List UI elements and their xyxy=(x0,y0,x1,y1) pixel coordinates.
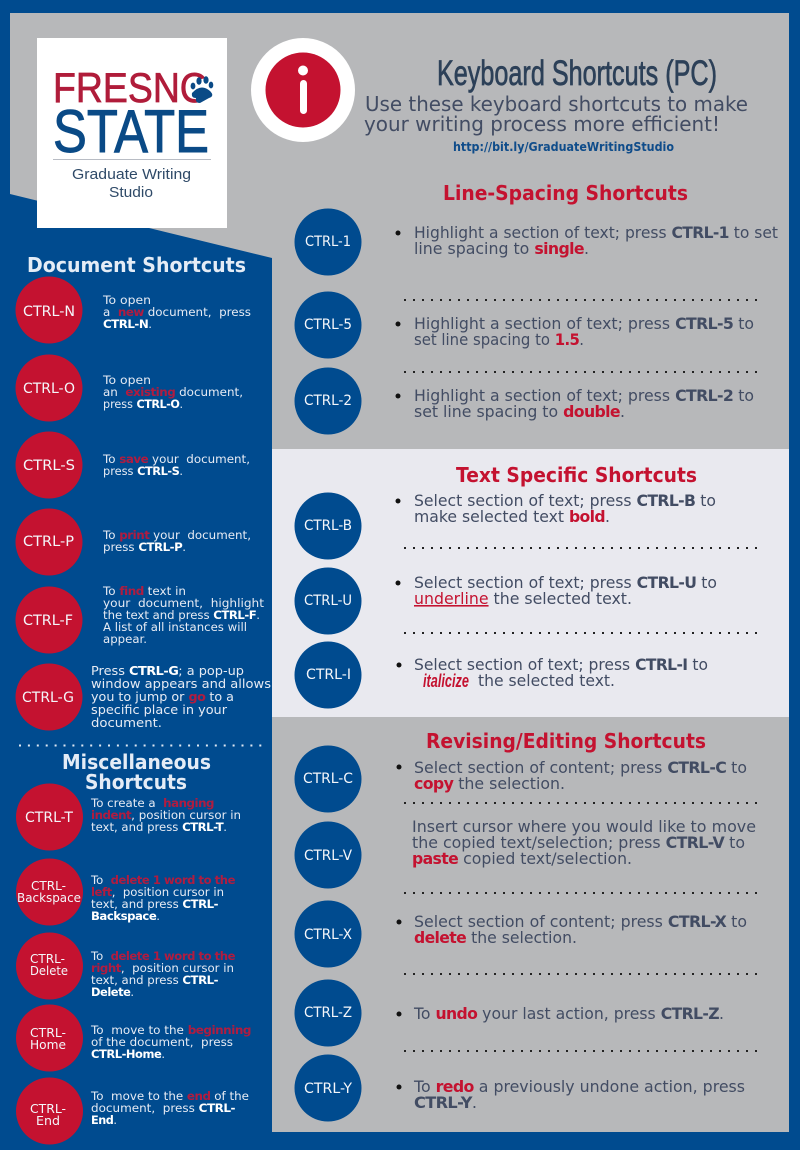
row: CTRL-Z: To undo your last action, press CTRL-Z. xyxy=(413,1004,724,1023)
row: CTRL-End: To move to the end of the xyxy=(90,1089,249,1103)
row: CTRL-Y xyxy=(294,1054,745,1122)
icon: information xyxy=(251,38,355,142)
logo: Fresno State Graduate Writing Studio: Studio xyxy=(109,184,153,201)
heading: revising/editing: Revising/Editing Shortcuts xyxy=(426,729,706,753)
row: CTRL-End: CTRL- xyxy=(30,1102,66,1117)
row: CTRL-G: CTRL-G xyxy=(22,690,74,706)
row: CTRL-O: an existing document, xyxy=(103,385,243,399)
row: CTRL-I: CTRL-I xyxy=(306,667,351,683)
row: CTRL-Z: CTRL-Z xyxy=(304,1005,352,1021)
row: CTRL-T: To create a hanging xyxy=(90,796,214,810)
row: CTRL-P xyxy=(16,508,251,576)
row: CTRL-N: CTRL-N xyxy=(23,304,75,320)
row: CTRL-N: CTRL-N. xyxy=(103,317,152,331)
row: CTRL-Backspace: Backspace xyxy=(17,891,81,906)
subtitle: your writing process more efficient! xyxy=(364,112,720,136)
row: CTRL-Home: CTRL- xyxy=(30,1026,66,1041)
row: CTRL-G: Press CTRL-G; a pop-up xyxy=(91,664,244,679)
row: CTRL-Delete xyxy=(16,932,235,1000)
row: CTRL-Backspace xyxy=(16,858,235,926)
row: CTRL-U: CTRL-U xyxy=(304,593,352,609)
heading: text specific: Text Specific Shortcuts xyxy=(456,463,697,487)
row: CTRL-G: you to jump or go to a xyxy=(91,690,234,705)
row: CTRL-End: document, press CTRL- xyxy=(91,1101,236,1115)
row: CTRL-X xyxy=(294,900,747,968)
row: CTRL-F: the text and press CTRL-F. xyxy=(103,608,260,622)
logo: Fresno State Graduate Writing Studio xyxy=(37,38,227,228)
row: CTRL-G: window appears and allows xyxy=(91,677,271,692)
row: CTRL-T: CTRL-T xyxy=(25,810,73,826)
row: CTRL-V: paste copied text/selection. xyxy=(412,849,632,868)
row: CTRL-I xyxy=(294,642,708,708)
row: CTRL-P: To print your document, xyxy=(102,528,251,542)
row: CTRL-Y: To redo a previously undone action, press xyxy=(413,1077,745,1096)
heading: miscellaneous shortcuts: Miscellaneous xyxy=(62,750,211,774)
row: CTRL-2: set line spacing to double. xyxy=(414,402,625,421)
row: CTRL-F: your document, highlight xyxy=(103,596,264,610)
row: CTRL-G xyxy=(16,664,271,731)
panel: miscellaneous shortcuts xyxy=(16,750,251,1144)
row: CTRL-Delete: To delete 1 word to the xyxy=(90,949,235,963)
row: CTRL-Delete: Delete. xyxy=(91,985,134,999)
row: CTRL-5 xyxy=(294,292,754,358)
panel: revising/editing shortcuts xyxy=(294,729,758,1122)
row: CTRL-Backspace: text, and press CTRL- xyxy=(91,897,219,911)
row: CTRL-Delete: text, and press CTRL- xyxy=(91,973,219,987)
row: CTRL-X: CTRL-X xyxy=(304,927,352,943)
row: CTRL-F: A list of all instances will xyxy=(103,620,247,634)
row: CTRL-B: make selected text bold. xyxy=(414,507,610,526)
row: CTRL-1: line spacing to single. xyxy=(414,239,589,258)
row: CTRL-Backspace: CTRL- xyxy=(31,879,66,894)
row: CTRL-Home xyxy=(16,1004,251,1072)
row: CTRL-T: text, and press CTRL-T. xyxy=(91,820,227,834)
panel: text specific shortcuts xyxy=(294,463,758,708)
row: CTRL-V: CTRL-V xyxy=(304,848,352,864)
row: CTRL-C: CTRL-C xyxy=(303,771,353,787)
row: CTRL-B xyxy=(294,491,716,560)
subtitle xyxy=(364,92,748,136)
row: CTRL-T: indent, position cursor in xyxy=(91,808,241,822)
row: CTRL-V: the copied text/selection; press CTRL-V to xyxy=(412,833,745,852)
row: CTRL-Home: Home xyxy=(30,1038,66,1053)
row: CTRL-2 xyxy=(294,368,754,434)
row: CTRL-N xyxy=(16,276,251,344)
row: CTRL-Backspace: To delete 1 word to the xyxy=(90,873,235,887)
row: CTRL-5: Highlight a section of text; press CTRL-5 to xyxy=(414,314,754,333)
logo: Fresno State Graduate Writing Studio: FRESNO xyxy=(53,64,209,111)
row: CTRL-Z xyxy=(294,980,724,1046)
heading: miscellaneous shortcuts: Shortcuts xyxy=(85,770,187,794)
row: CTRL-O xyxy=(16,354,243,422)
row: CTRL-S: press CTRL-S. xyxy=(103,464,183,478)
row: CTRL-Home: CTRL-Home. xyxy=(91,1047,165,1061)
row: CTRL-5: set line spacing to 1.5. xyxy=(414,330,584,349)
row: CTRL-G: document. xyxy=(91,716,162,731)
row: CTRL-P: CTRL-P xyxy=(23,534,74,550)
row: CTRL-Backspace: left, position cursor in xyxy=(91,885,224,899)
row: CTRL-Delete: Delete xyxy=(30,964,68,979)
row: CTRL-U: underline the selected text. xyxy=(414,589,632,608)
row: CTRL-2: Highlight a section of text; press CTRL-2 to xyxy=(414,386,754,405)
row: CTRL-B: Select section of text; press CTRL-B to xyxy=(414,491,716,510)
row: CTRL-End: End xyxy=(36,1114,60,1129)
row: CTRL-Delete: CTRL- xyxy=(30,952,65,967)
row: CTRL-I: Select section of text; press CTRL-I to xyxy=(414,655,708,674)
row: CTRL-2: CTRL-2 xyxy=(304,393,352,409)
row: CTRL-F: CTRL-F xyxy=(23,613,73,629)
row: CTRL-S: CTRL-S xyxy=(23,458,75,474)
row: CTRL-S: To save your document, xyxy=(102,452,250,466)
row: CTRL-1 xyxy=(294,208,778,276)
row: CTRL-P: press CTRL-P. xyxy=(103,540,186,554)
row: CTRL-Home: of the document, press xyxy=(91,1035,233,1049)
row: CTRL-C: Select section of content; press CTRL-C to xyxy=(414,758,747,777)
heading: miscellaneous shortcuts xyxy=(62,750,211,794)
row: CTRL-B: CTRL-B xyxy=(304,518,352,534)
row: CTRL-O: To open xyxy=(102,373,151,387)
row: CTRL-C xyxy=(294,746,747,812)
logo: Fresno State Graduate Writing Studio: Graduate Writing xyxy=(72,166,191,183)
row: CTRL-V xyxy=(294,817,756,888)
row: CTRL-Y: CTRL-Y xyxy=(304,1081,352,1097)
row: CTRL-End: End. xyxy=(91,1113,117,1127)
logo: Fresno State Graduate Writing Studio: STATE xyxy=(53,98,209,165)
row: CTRL-G: specific place in your xyxy=(91,703,228,718)
row: CTRL-5: CTRL-5 xyxy=(304,317,352,333)
row: CTRL-U: Select section of text; press CTRL-U to xyxy=(414,573,717,592)
row: CTRL-O: CTRL-O xyxy=(23,381,75,397)
panel: line-spacing shortcuts xyxy=(294,181,778,434)
row: CTRL-I: italicize xyxy=(423,671,469,691)
link: http://bit.ly/GraduateWritingStudio xyxy=(453,139,674,154)
heading: document shortcuts: Document Shortcuts xyxy=(27,253,246,277)
row: CTRL-N: a new document, press xyxy=(103,305,251,319)
row: CTRL-F xyxy=(16,584,264,654)
row: CTRL-U xyxy=(294,568,717,634)
row: CTRL-V: Insert cursor where you would like to move xyxy=(412,817,756,836)
heading: line-spacing: Line-Spacing Shortcuts xyxy=(443,181,688,205)
row: CTRL-O: press CTRL-O. xyxy=(103,397,183,411)
row: CTRL-I: the selected text. xyxy=(478,671,615,690)
row: CTRL-Delete: right, position cursor in xyxy=(91,961,234,975)
row: CTRL-F: To find text in xyxy=(102,584,186,598)
row: CTRL-1: CTRL-1 xyxy=(305,234,351,250)
row: CTRL-F: appear. xyxy=(103,632,147,646)
row: CTRL-Y: CTRL-Y. xyxy=(414,1093,477,1112)
subtitle: Use these keyboard shortcuts to make xyxy=(365,92,748,116)
row: CTRL-C: copy the selection. xyxy=(414,774,565,793)
panel: text specific background xyxy=(272,449,789,717)
row: CTRL-N: To open xyxy=(102,293,151,307)
row: CTRL-X: Select section of content; press CTRL-X to xyxy=(414,912,747,931)
panel: document shortcuts xyxy=(16,253,271,731)
row: CTRL-T xyxy=(16,784,241,850)
row: CTRL-End xyxy=(16,1078,249,1144)
row: CTRL-Backspace: Backspace. xyxy=(91,909,160,923)
row: CTRL-1: Highlight a section of text; press CTRL-1 to set xyxy=(414,223,778,242)
row: CTRL-Home: To move to the beginning xyxy=(90,1023,251,1037)
row: CTRL-S xyxy=(16,432,250,498)
row: CTRL-X: delete the selection. xyxy=(414,928,577,947)
